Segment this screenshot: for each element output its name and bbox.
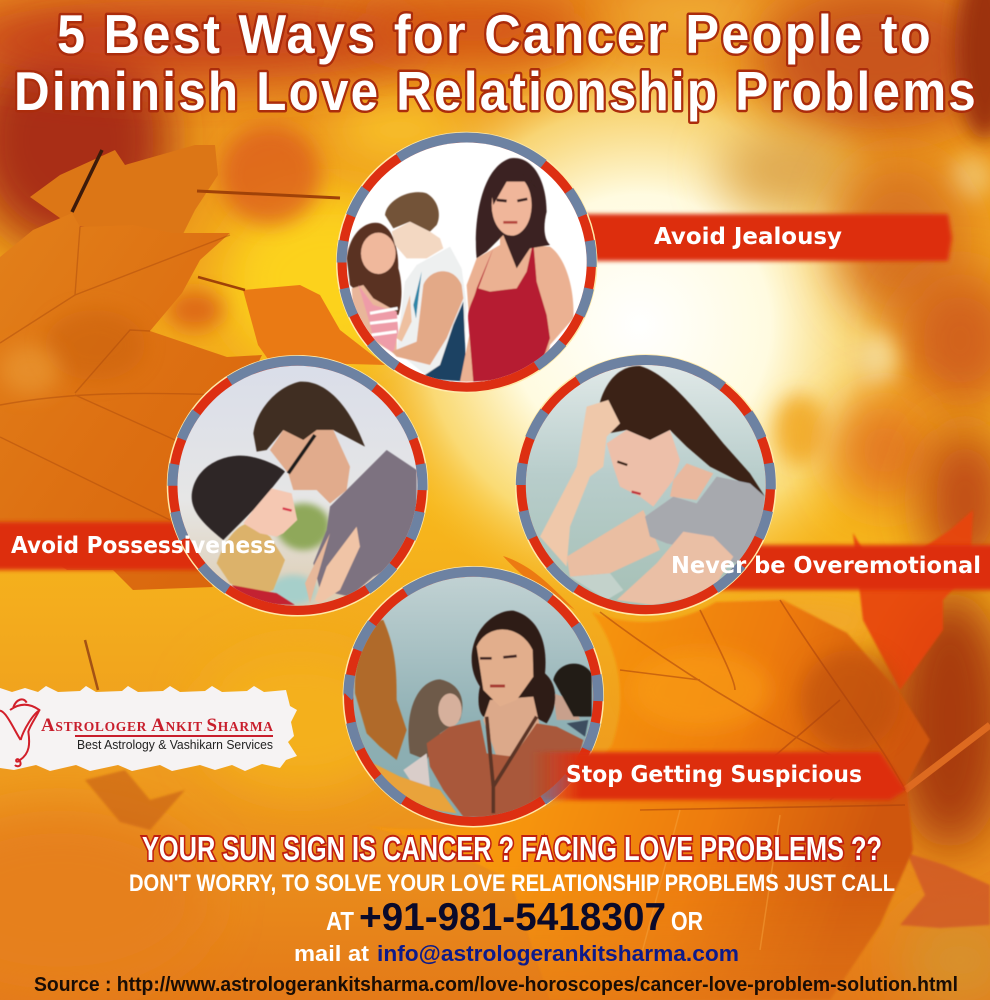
leaves: left cluster (0, 145, 385, 830)
icon: Ganesha mark (0, 699, 40, 766)
email line: mail at (294, 941, 370, 966)
phone line: OR (671, 906, 703, 936)
logo underline (75, 735, 273, 737)
label: Avoid Possessiveness: Avoid Possessiveness (11, 533, 276, 559)
ribbon: Avoid Jealousy (570, 214, 952, 261)
logo: Astrologer Ankit Sharma (0, 686, 297, 771)
source line: Source : http://www.astrologerankitsharma.com/love-horoscopes/cancer-love-problem-solution.html (34, 974, 958, 996)
title: 5 Best Ways for Cancer People to (57, 3, 933, 65)
ribbon: Never be Overemotional (680, 545, 990, 590)
logo title: ASTROLOGER ANKIT SHARMA (41, 715, 273, 736)
title (14, 3, 978, 122)
photo circle: Never be Overemotional (516, 355, 780, 615)
label: Avoid Jealousy: Avoid Jealousy (654, 224, 842, 250)
phone line: +91-981-5418307 (359, 896, 666, 939)
ribbon: Stop Getting Suspicious (530, 752, 906, 800)
leaves: right cluster (368, 510, 990, 1000)
logo tagline: Best Astrology & Vashikarn Services (77, 738, 273, 752)
photo circle: Avoid Jealousy (337, 132, 600, 395)
ribbon: Avoid Possessiveness (0, 522, 260, 570)
photo circle: Stop Getting Suspicious (343, 567, 605, 827)
phone line: AT (326, 906, 354, 936)
photo circle: Avoid Possessiveness (168, 356, 430, 616)
label: Stop Getting Suspicious: Stop Getting Suspicious (566, 762, 862, 788)
label: Never be Overemotional: Never be Overemotional (671, 553, 981, 579)
email line: info@astrologerankitsharma.com (377, 941, 739, 966)
